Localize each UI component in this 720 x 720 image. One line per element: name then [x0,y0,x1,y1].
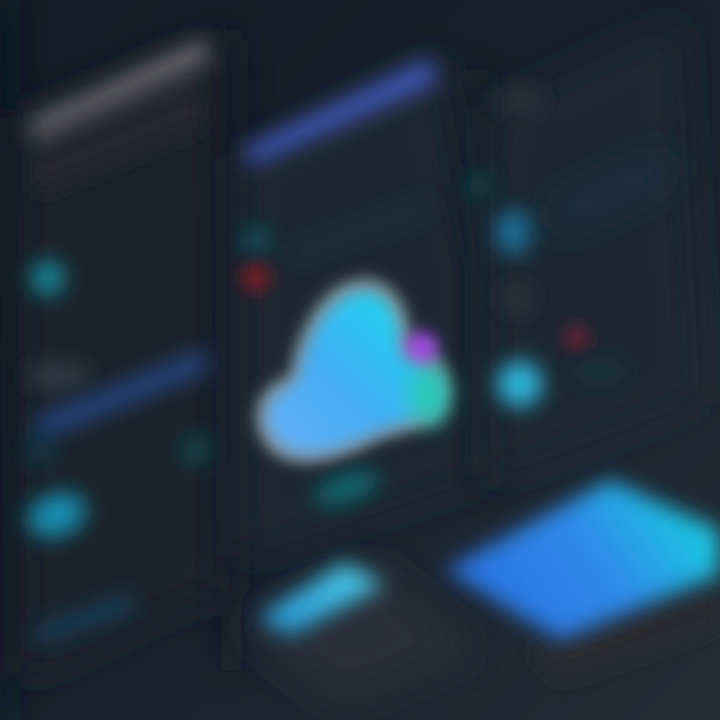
left bottom bar [32,592,135,645]
icon: left bright pill [22,485,92,545]
middle faint bar [290,195,432,265]
left column items [22,261,211,645]
icon: right bright dot [497,361,543,407]
icon: cloud [255,278,450,463]
panel: middle column [240,55,484,560]
icon: left dim teal dot small [181,435,211,465]
icon: right blue dot [496,209,532,255]
left column header bar [30,40,210,195]
left grey label [26,364,90,388]
middle column header bar [245,58,438,166]
icon: right dim teal dot [467,173,493,199]
icon: right red dot [564,325,590,351]
panel: left column [0,0,238,720]
cloud green edge [410,365,450,425]
cloud purple accent [406,332,438,362]
right faint bar [550,150,672,235]
left blue bar [35,348,208,442]
right grey dot [502,283,532,313]
right dim teal bar [572,361,628,383]
icon: middle teal dot [242,226,270,254]
icon: red dot [241,263,271,293]
panel: right column [490,20,700,480]
device: phone [240,562,478,705]
right grey label [496,86,544,114]
icon: left dim teal dot [27,439,53,465]
icon: left teal dot [31,261,65,295]
middle column items [241,195,432,293]
cloud base teal pill [311,464,383,512]
device: tablet [445,480,720,680]
right column items [467,86,672,407]
